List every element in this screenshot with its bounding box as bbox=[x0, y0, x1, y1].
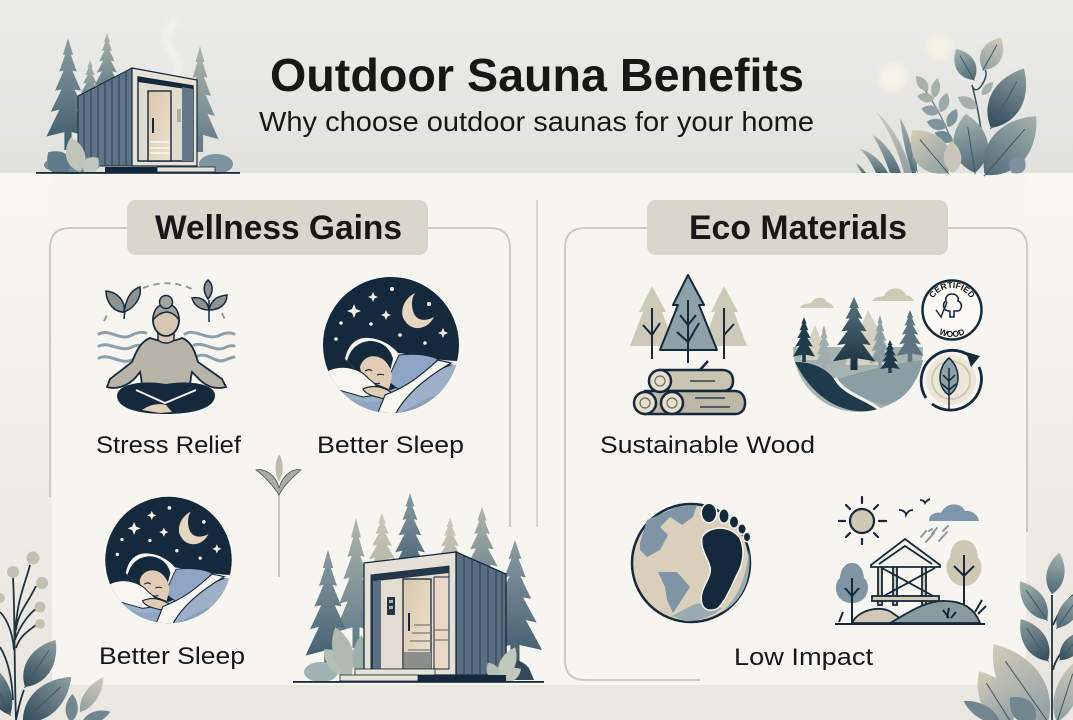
stem bbox=[1052, 595, 1073, 720]
steam bbox=[166, 18, 179, 78]
central tree bbox=[660, 275, 717, 350]
icon: earth with footprint bbox=[632, 504, 750, 622]
leaves bbox=[960, 551, 1073, 720]
header botanical decoration bbox=[856, 33, 1051, 189]
icon: dashed arc bbox=[104, 283, 226, 322]
continents bbox=[640, 505, 750, 621]
forest bbox=[306, 493, 542, 670]
sun bbox=[839, 497, 886, 544]
icon: small sprout bbox=[256, 454, 301, 577]
header illustration: outdoor sauna with trees bbox=[36, 18, 240, 180]
berries bbox=[0, 552, 48, 629]
trees bbox=[46, 33, 219, 152]
left tree bbox=[836, 563, 868, 623]
panel: body divider bbox=[536, 200, 538, 527]
fern bbox=[913, 73, 961, 146]
title: Outdoor Sauna Benefits bbox=[270, 49, 804, 101]
panel frame bbox=[50, 228, 510, 527]
icon: waves bbox=[99, 332, 234, 361]
cabin front frame bbox=[364, 552, 456, 675]
cabin bbox=[78, 68, 197, 166]
label: sustainable wood: Sustainable Wood bbox=[600, 432, 815, 459]
structure bbox=[871, 539, 940, 605]
header band bbox=[0, 0, 1073, 173]
icon: sustainable wood bbox=[630, 275, 747, 414]
left plants bbox=[304, 624, 369, 682]
big leaves bbox=[899, 33, 1051, 189]
plants bbox=[40, 135, 233, 180]
icon: sleeping person, night sky bbox=[321, 277, 461, 415]
label: better sleep: Better Sleep bbox=[317, 432, 464, 459]
botanical decoration: bottom right bbox=[960, 551, 1073, 720]
icon: meditation bbox=[99, 280, 234, 414]
icon: low-impact structure in nature bbox=[835, 497, 986, 624]
logs bbox=[634, 361, 745, 414]
icon: sleeping person, night sky (second) bbox=[103, 497, 234, 625]
heading pill bbox=[647, 200, 948, 255]
tree branches bbox=[643, 300, 734, 363]
heading: Wellness Gains bbox=[155, 209, 402, 247]
heading: Eco Materials bbox=[689, 209, 907, 247]
panel: eco materials bbox=[564, 200, 1028, 681]
glowing lights bbox=[879, 34, 952, 91]
torso and arms bbox=[107, 338, 226, 390]
ground bbox=[835, 600, 986, 624]
stems bbox=[0, 565, 36, 720]
panel frame bbox=[565, 228, 1027, 680]
hills bbox=[852, 601, 980, 623]
badge: renewable cycle bbox=[921, 350, 981, 411]
clouds bbox=[800, 288, 914, 308]
birds bbox=[899, 499, 930, 515]
footprint bbox=[702, 504, 750, 609]
panel: wellness gains bbox=[50, 200, 544, 685]
steps and ground bbox=[293, 669, 544, 683]
illustration: sauna cabin with forest bbox=[293, 493, 544, 685]
grass blades bbox=[856, 112, 918, 173]
badge: certified wood bbox=[921, 279, 983, 341]
icon: leaves left bbox=[106, 287, 140, 319]
right plants bbox=[483, 644, 534, 685]
step and ground bbox=[36, 167, 240, 174]
leaves bbox=[0, 633, 112, 720]
botanical decoration: bottom left bbox=[0, 552, 112, 720]
legs bbox=[117, 382, 215, 414]
cloud and rain bbox=[921, 504, 979, 542]
subtitle: Why choose outdoor saunas for your home bbox=[259, 106, 814, 137]
tan trees bbox=[630, 286, 747, 346]
heading pill bbox=[127, 200, 428, 255]
cabin side bbox=[456, 552, 506, 675]
right tree bbox=[946, 540, 982, 607]
badge: certified wood: WOOD bbox=[940, 328, 964, 337]
label: stress relief: Stress Relief bbox=[96, 432, 241, 459]
control panel bbox=[387, 597, 395, 615]
door bbox=[403, 579, 431, 669]
icon: leaves right bbox=[192, 280, 227, 322]
label: better sleep (second): Better Sleep bbox=[99, 643, 245, 670]
head bbox=[158, 331, 174, 343]
label: low impact: Low Impact bbox=[734, 644, 873, 671]
icon: forest landscape bbox=[793, 288, 924, 412]
badge: certified wood: CERTIFIED bbox=[930, 282, 974, 298]
